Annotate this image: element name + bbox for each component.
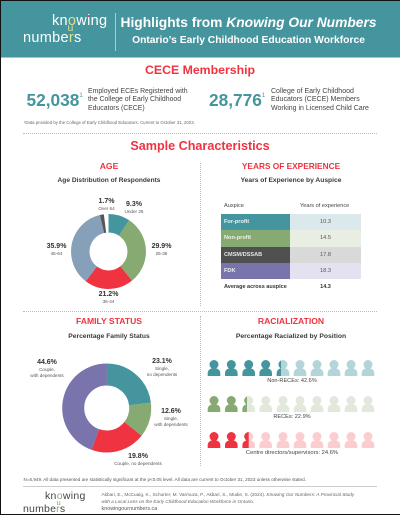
label: 36-44 [98, 291, 118, 304]
row: RECEs [208, 396, 374, 412]
label: 45-64: 45-64 [51, 251, 62, 256]
footer logo: u [56, 498, 61, 507]
label: 25-35: 25-35 [156, 251, 167, 256]
label: couple with dependents [30, 359, 64, 378]
header subtitle: Ontario’s Early Childhood Education Workforce [132, 35, 365, 46]
citation [102, 492, 354, 504]
label: single with dependents: 12.6% [161, 408, 181, 415]
footer logo: knowing [45, 490, 86, 502]
table row: average: Average across auspice [224, 284, 287, 290]
label: 45-64 [46, 243, 66, 256]
label: over 64: Over 64 [98, 206, 115, 211]
age heading: AGE [100, 161, 118, 171]
table row: for-profit [221, 214, 361, 230]
table row: FDK: 18.3 [320, 268, 331, 274]
website: knowingournumbers.ca [102, 506, 157, 512]
label: single no dependents: 23.1% [152, 358, 172, 365]
stat description: employed ECEs: Employed ECEs Registered with [88, 88, 188, 94]
page edge: left [0, 0, 1, 515]
logo: numbers [23, 30, 82, 46]
table row: average: 14.3 [320, 284, 331, 290]
table row: for-profit: 10.3 [320, 219, 331, 225]
stat description: CECE members: Educators (CECE) Members [271, 96, 360, 103]
family chart title: Percentage Family Status [68, 333, 150, 340]
table row: FDK: FDK [224, 268, 236, 274]
stat description: CECE members: Working in Licensed Child Care [271, 104, 369, 112]
stat description: employed ECEs: Educators (CECE) [88, 104, 145, 112]
logo [23, 13, 107, 46]
table row: FDK [221, 263, 361, 279]
header divider [115, 13, 116, 51]
table row: CMSM/DSSAB: 17.8 [320, 252, 331, 258]
heading: Sample Characteristics: Sample Characteristics [130, 139, 270, 153]
panel: years of experience [221, 161, 361, 290]
panel: family status [30, 316, 188, 466]
people pictogram chart [208, 360, 374, 448]
label: non-RECEs: Non-RECEs: 42.6% [267, 378, 317, 384]
family heading: FAMILY STATUS [76, 316, 142, 326]
panel: age [46, 161, 172, 304]
table row: non-profit [221, 230, 361, 247]
label: under 25 [124, 201, 144, 214]
row: non-RECEs [208, 360, 374, 376]
label: RECEs: RECEs: 22.9% [273, 414, 311, 420]
data source note: ¹Data provided by the College of Early Childhood Educators. Current to October 31, 2023. [24, 120, 195, 125]
footnote: N=5,949. All data presented are statistically significant at the p<0.05 level. All data are current to October 31, 2023 unless otherwise stated. [24, 476, 306, 482]
label: single no dependents [147, 358, 177, 377]
label: 25-35: 29.9% [152, 243, 171, 250]
label: under 25: Under 25 [125, 209, 143, 214]
stat description: employed ECEs [88, 88, 188, 112]
label: over 64: 1.7% [99, 198, 114, 205]
label: centre directors: Centre directors/supervisors: 24.6% [246, 450, 338, 456]
page edge: top [0, 0, 400, 1]
label: single with dependents [154, 408, 188, 427]
label: 25-35 [152, 243, 172, 256]
logo: knowing [52, 13, 107, 29]
footer logo [23, 490, 86, 514]
racialization heading: RACIALIZATION [258, 316, 324, 326]
label: 45-64: 35.9% [47, 243, 66, 250]
label: single with dependents: with dependents [154, 422, 188, 427]
label: single no dependents: Single, [155, 366, 169, 371]
stat description: employed ECEs: the College of Early Childhood [88, 96, 181, 103]
age chart title: Age Distribution of Respondents [58, 177, 160, 184]
logo: u [68, 22, 73, 34]
label: under 25: 9.3% [126, 201, 142, 208]
header title: Highlights from Knowing Our Numbers [120, 15, 377, 30]
years heading: YEARS OF EXPERIENCE [242, 161, 340, 171]
label: couple with dependents: with dependents [30, 373, 64, 378]
label: couple with dependents: Couple, [39, 367, 55, 372]
stat description: CECE members: College of Early Childhood [271, 88, 354, 94]
label: 36-44: 21.2% [99, 291, 118, 298]
table header: Years of experience [300, 203, 349, 209]
citation: with a Local Lens on the Early Childhood Education Workforce in Ontario. [102, 498, 254, 504]
label: couple no dependents: 19.8% [128, 453, 148, 460]
citation: Akbari, E., McCuaig, K., Schurter, M. Varmuza, P., Akbari, S., Mudie, S. (2024). Knowing Our Numbers: A Provincial Study [102, 492, 354, 497]
racialization chart title: Percentage Racialized by Position [236, 333, 346, 340]
table header: Auspice [224, 203, 244, 209]
panel: racialization [208, 316, 374, 456]
age donut chart [71, 214, 146, 289]
heading: CECE Membership: CECE Membership [145, 63, 255, 77]
table row: CMSM/DSSAB: CMSM/DSSAB [224, 252, 262, 258]
table row: non-profit: 14.5 [320, 235, 331, 241]
table row: non-profit: Non-profit [224, 235, 251, 241]
header banner [1, 1, 400, 58]
label: couple with dependents: 44.6% [37, 359, 57, 366]
page edge: bottom [0, 514, 400, 515]
years chart title: Years of Experience by Auspice [241, 177, 341, 184]
table header [224, 203, 349, 209]
label: single no dependents: no dependents [147, 372, 177, 377]
stat: 52,038: 52,0381 [26, 90, 83, 110]
label: over 64 [98, 198, 115, 211]
stat: 28,776: 28,7761 [209, 90, 265, 110]
table row: for-profit: For-profit [224, 219, 249, 225]
label: 36-44: 36-44 [103, 299, 114, 304]
family donut chart [62, 364, 152, 452]
table row: average [224, 284, 331, 290]
label: single with dependents: Single, [164, 416, 178, 421]
row: centre directors [208, 432, 374, 448]
stat description: CECE members [271, 88, 369, 112]
label: couple no dependents: Couple, no dependents [114, 461, 162, 466]
label: couple no dependents [114, 453, 162, 466]
table row: CMSM/DSSAB [221, 247, 361, 263]
